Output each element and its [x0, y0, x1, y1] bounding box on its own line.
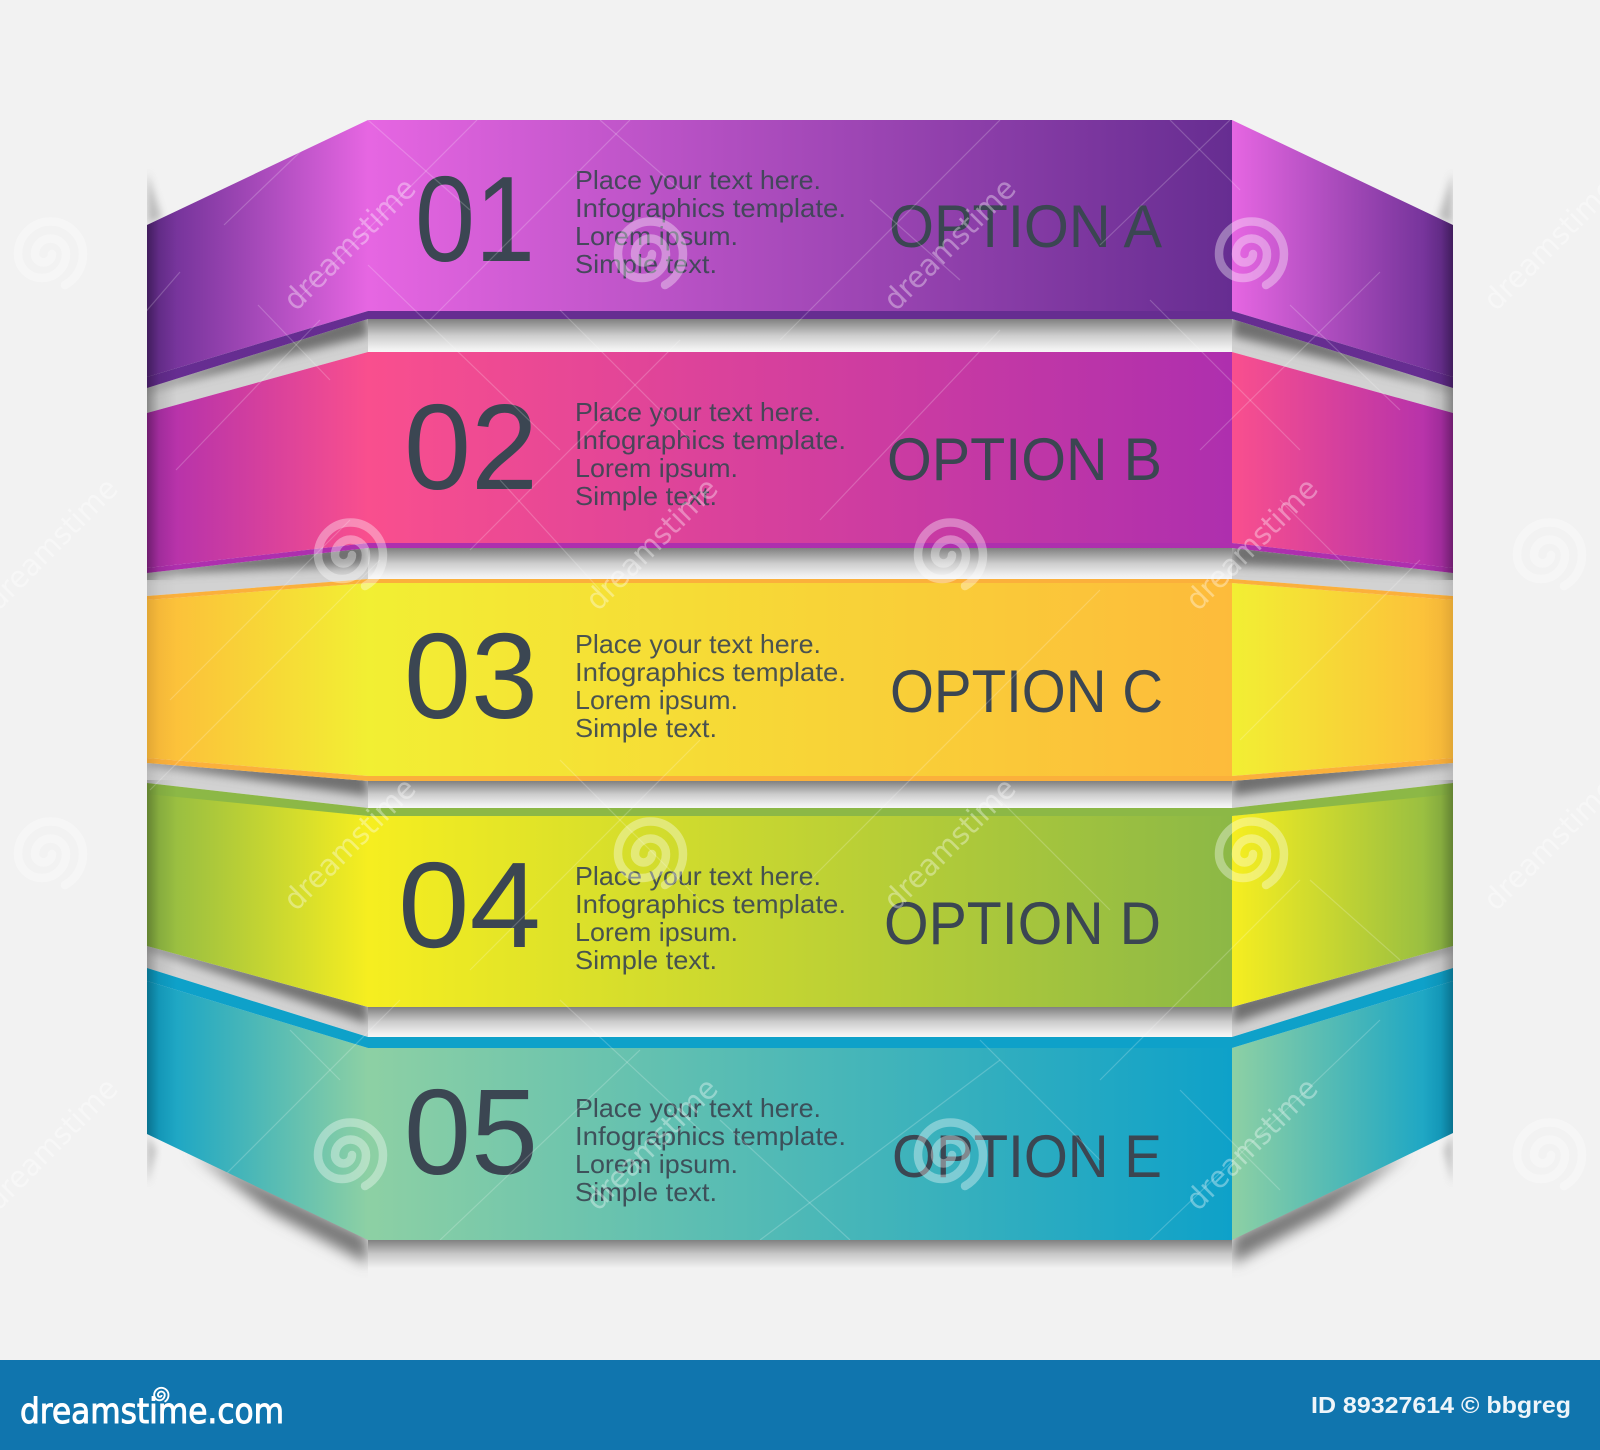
- band 01 left fold: [147, 120, 368, 377]
- footer logo: dreamstime.com: [20, 1392, 284, 1432]
- band 02 right fold: [1232, 352, 1453, 568]
- watermark wordmarks: dreamstime: [277, 771, 423, 918]
- description 04: Place your text here.: [575, 861, 821, 891]
- watermark wordmarks: dreamstime: [1179, 471, 1325, 618]
- description 03: Place your text here.: [575, 629, 821, 659]
- number 04: 04: [398, 837, 541, 973]
- panel: band 02 option B: [147, 352, 1453, 573]
- band 04 left fold: [147, 792, 368, 1007]
- band 01 right fold: [1232, 120, 1453, 377]
- band 01 lower lip: [147, 311, 1453, 388]
- description 05: [575, 1093, 846, 1207]
- band 02 lower lip: [147, 543, 1453, 573]
- watermark wordmarks: dreamstime: [579, 1071, 725, 1218]
- spiral row 1: [18, 222, 1284, 285]
- watermark lattice lines: [130, 85, 1420, 1240]
- option B label: OPTION B: [887, 426, 1162, 493]
- gaps between the bands: [147, 310, 1453, 1037]
- band 03 right fold: [1232, 583, 1453, 776]
- watermark wordmarks: dreamstime: [877, 771, 1023, 918]
- text: band 01: [415, 151, 1162, 287]
- band 03 top and bottom lips: [147, 579, 1453, 781]
- panel: band 01 option A: [147, 120, 1453, 388]
- description 05: Lorem ipsum.: [575, 1149, 738, 1179]
- watermark wordmarks: dreamstime: [277, 171, 423, 318]
- number 01: 01: [415, 151, 535, 287]
- band 04 centre face: [368, 816, 1232, 1007]
- description 03: Simple text.: [575, 713, 717, 743]
- description 04: Lorem ipsum.: [575, 917, 738, 947]
- band 05 right fold: [1232, 981, 1453, 1240]
- footer bar: [0, 1360, 1600, 1450]
- band 02 centre face: [368, 352, 1232, 543]
- watermark wordmarks: dreamstime: [1179, 1071, 1325, 1218]
- description 03: [575, 629, 846, 743]
- band 04 right fold: [1232, 792, 1453, 1007]
- text: band 05: [404, 1064, 1162, 1207]
- description 03: Lorem ipsum.: [575, 685, 738, 715]
- band 03 centre face: [368, 583, 1232, 776]
- description 02: Simple text.: [575, 481, 717, 511]
- band 03 left fold: [147, 583, 368, 776]
- icon: logo spiral: [154, 1388, 168, 1402]
- description 03: Infographics template.: [575, 657, 846, 687]
- number 05: 05: [404, 1064, 538, 1200]
- description 02: Place your text here.: [575, 397, 821, 427]
- band 01 centre face: [368, 120, 1232, 311]
- watermark spirals: [18, 222, 1582, 1186]
- description 01: Place your text here.: [575, 165, 821, 195]
- shadows behind the stack: [147, 172, 1453, 1268]
- number 02: 02: [404, 379, 538, 515]
- text: band 02: [404, 379, 1162, 515]
- watermark wordmarks: dreamstime: [579, 471, 725, 618]
- description 01: [575, 165, 846, 279]
- description 02: Lorem ipsum.: [575, 453, 738, 483]
- description 01: Simple text.: [575, 249, 717, 279]
- band 05 left fold: [147, 981, 368, 1240]
- watermark wordmarks: [0, 171, 1600, 1218]
- panel: band 04 option D: [147, 783, 1453, 1007]
- watermark wordmarks: dreamstime: [877, 171, 1023, 318]
- spiral row 3: [18, 822, 1284, 885]
- text: band 04: [398, 837, 1161, 975]
- description 01: Lorem ipsum.: [575, 221, 738, 251]
- description 04: Simple text.: [575, 945, 717, 975]
- description 01: Infographics template.: [575, 193, 846, 223]
- spiral row 4: [318, 1122, 1582, 1186]
- outer edge shading: [147, 200, 1453, 1160]
- description 02: [575, 397, 846, 511]
- number 03: 03: [404, 608, 538, 744]
- description 04: [575, 861, 846, 975]
- band 05 top lip: [147, 968, 1453, 1048]
- description 02: Infographics template.: [575, 425, 846, 455]
- panel: band 05 option E: [147, 968, 1453, 1240]
- footer image id and credit: ID 89327614 © bbgreg: [1311, 1392, 1571, 1418]
- description 05: Simple text.: [575, 1177, 717, 1207]
- option D label: OPTION D: [884, 890, 1161, 957]
- option E label: OPTION E: [892, 1123, 1162, 1190]
- spiral row 2: [318, 522, 1582, 586]
- option C label: OPTION C: [890, 658, 1163, 725]
- description 04: Infographics template.: [575, 889, 846, 919]
- description 05: Place your text here.: [575, 1093, 821, 1123]
- description 05: Infographics template.: [575, 1121, 846, 1151]
- panel: band 03 option C: [147, 579, 1453, 781]
- band 02 left fold: [147, 352, 368, 568]
- option A label: OPTION A: [889, 193, 1162, 260]
- band 05 centre face: [368, 1048, 1232, 1240]
- band 04 top lip: [147, 783, 1453, 816]
- text: band 03: [404, 608, 1163, 744]
